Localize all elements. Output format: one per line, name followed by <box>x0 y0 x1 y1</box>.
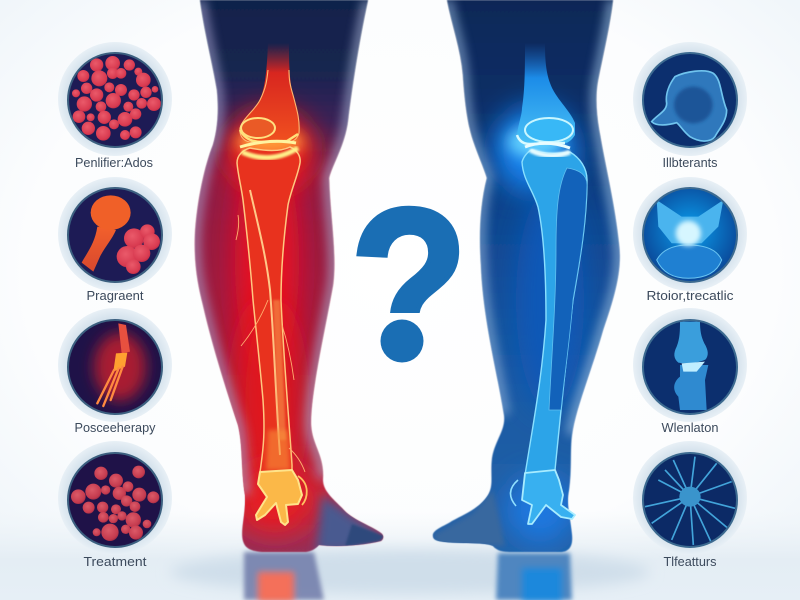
label: right 2: Rtoior,trecatlic <box>646 288 734 303</box>
blue ankle bones <box>510 470 575 524</box>
red leg <box>195 0 385 552</box>
blue tibia bone <box>522 143 587 480</box>
icon: left 1 red cell cluster <box>58 42 172 156</box>
red ankle bones <box>256 470 307 525</box>
red knee glow <box>236 128 304 156</box>
label: left 2: Pragraent <box>86 288 144 303</box>
question mark <box>356 206 460 362</box>
label: left 3: Posceeherapy <box>74 420 156 435</box>
icon: right 4 nerve star <box>633 441 747 555</box>
label: right 1: Illbterants <box>662 155 718 170</box>
label: left 4: Treatment <box>84 554 147 569</box>
red femur bone <box>240 43 299 142</box>
icon: right 2 glowing joint <box>633 177 747 291</box>
icon: right 1 blue mass <box>633 42 747 156</box>
label: right 3: Wlenlaton <box>662 420 718 435</box>
question mark: ? <box>350 163 468 408</box>
floor <box>0 510 800 600</box>
icon: left 2 stalk and cluster <box>58 177 172 291</box>
label: left 1: Penlifier:Ados <box>75 155 153 170</box>
icon: left 3 glowing bone <box>58 308 172 422</box>
blue femur bone <box>517 43 575 144</box>
label: right 4: Tlfeatturs <box>664 554 717 569</box>
red nerve strands <box>236 215 305 472</box>
blue leg <box>433 0 620 552</box>
blue knee glow <box>507 126 563 158</box>
icon: left 4 red cells <box>58 441 172 555</box>
reflection: red leg <box>244 552 324 600</box>
red tibia bone <box>237 141 300 475</box>
reflection: blue leg <box>496 553 572 600</box>
floor shadow <box>170 550 650 594</box>
icon: right 3 knee bones <box>633 308 747 422</box>
